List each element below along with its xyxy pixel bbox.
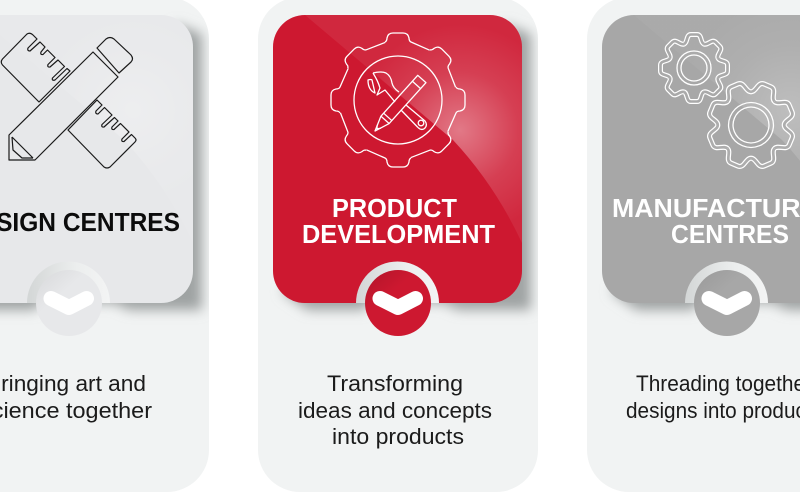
panel: manufacturing centres [587,0,800,492]
icon: chevron badge [685,262,768,336]
text: product description [298,371,492,449]
heading: product development [302,195,495,249]
icon: pencil and rulers [1,33,136,168]
panel: product development [258,0,538,492]
icon: two gears [660,34,800,181]
heading: manufacturing centres: CENTRES [671,221,789,249]
text: product description: into products [332,424,464,449]
panel: design centres [0,0,209,492]
icon: chevron badge [356,262,439,336]
text: product description: ideas and concepts [298,398,492,423]
text: product description: Transforming [327,371,463,396]
icon: chevron badge [27,262,110,336]
heading: product development: DEVELOPMENT [302,221,495,249]
icon: gear with wrench and pencil [328,30,468,170]
text: design description [0,371,152,423]
heading: product development: PRODUCT [332,195,457,223]
heading: manufacturing centres [612,195,800,249]
text: manufacturing description [626,371,800,423]
